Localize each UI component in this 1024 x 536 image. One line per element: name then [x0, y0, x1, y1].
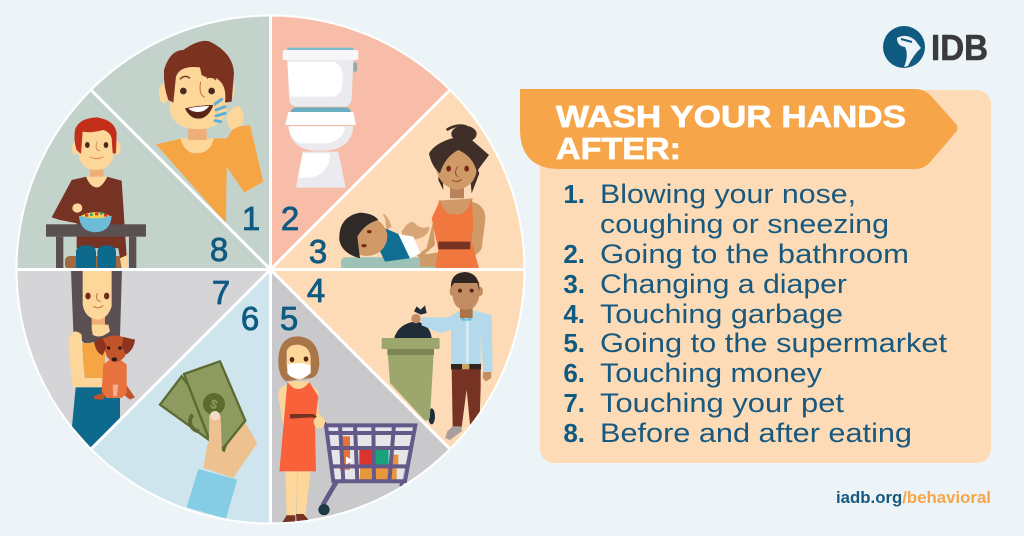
illustration: mother changing a diaper [339, 126, 489, 271]
illustration: hand holding money [160, 361, 257, 519]
item 8: 8. [563, 418, 585, 448]
item 4: 4. [563, 299, 585, 329]
sector 6 background [92, 270, 270, 522]
illustration: man eating at a table [46, 117, 146, 270]
item 1: coughing or sneezing [600, 209, 889, 239]
wheel number 3: 3 [309, 233, 327, 270]
wheel number 6: 6 [241, 300, 259, 337]
logo wordmark: IDB [931, 27, 988, 68]
item 6: 6. [563, 358, 585, 388]
item 7: Touching your pet [600, 388, 845, 418]
item 1 [563, 179, 889, 239]
illustration: woman with shopping cart [278, 336, 415, 523]
sector 5 background [270, 270, 449, 522]
illustration: toilet [283, 48, 358, 188]
item 2: Going to the bathroom [600, 239, 909, 269]
item 3: 3. [563, 269, 585, 299]
item 1: 1. [563, 179, 585, 209]
panel: list background [540, 90, 991, 463]
wheel number 5: 5 [280, 300, 298, 337]
illustration: man sneezing [156, 41, 263, 223]
item 2: 2. [563, 239, 585, 269]
illustration: hand holding money: $ [208, 397, 219, 412]
wheel number 8: 8 [210, 231, 228, 268]
sector 2 background [270, 16, 449, 270]
heading text line 1: WASH YOUR HANDS [556, 99, 906, 134]
sector 4 background [270, 270, 524, 448]
numbered list [563, 179, 948, 448]
sector 8 background [18, 91, 270, 269]
wheel dividers [17, 16, 524, 523]
wheel number 4: 4 [307, 272, 325, 309]
item 5: Going to the supermarket [600, 328, 948, 358]
illustration: woman holding a dog [68, 270, 135, 448]
IDB logo [883, 26, 988, 68]
item 1: Blowing your nose, [600, 179, 856, 209]
footer url: iadb.org/behavioral [836, 488, 991, 507]
wheel number 7: 7 [212, 274, 230, 311]
item 7: 7. [563, 388, 585, 418]
heading text line 2: AFTER: [556, 131, 681, 166]
wheel number 2: 2 [281, 200, 299, 237]
illustration: man with garbage bin [382, 272, 493, 440]
item 6: Touching money [600, 358, 823, 388]
heading banner [520, 89, 958, 169]
pie wheel of eight situations [16, 14, 526, 524]
sector 3 background [270, 91, 524, 269]
item 3: Changing a diaper [600, 269, 847, 299]
item 8: Before and after eating [600, 418, 912, 448]
sector 1 background [92, 16, 270, 270]
item 4: Touching garbage [600, 299, 843, 329]
sector 7 background [17, 270, 270, 448]
item 5: 5. [563, 328, 585, 358]
icon: globe [883, 26, 925, 68]
wheel number 1: 1 [242, 200, 260, 237]
